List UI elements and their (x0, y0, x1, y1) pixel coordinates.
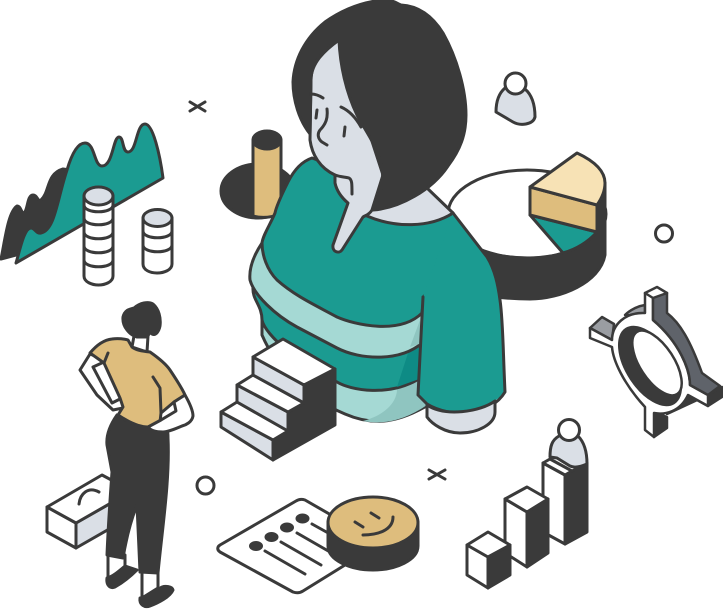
sweater dark shade (397, 343, 422, 387)
hair (123, 303, 160, 337)
left spoke top (590, 317, 614, 340)
icon: cylinder with shadow (221, 131, 295, 218)
grey side band (653, 293, 720, 395)
top grey facet (625, 305, 645, 316)
small cube (467, 545, 488, 588)
top spoke cap (645, 287, 667, 298)
face and neck (310, 40, 383, 252)
icon: smiley coin (328, 497, 418, 570)
shirt (90, 339, 185, 427)
cuff (427, 401, 495, 433)
icon: tall coin stack (84, 187, 113, 285)
face details (311, 94, 361, 194)
person on bar (550, 436, 587, 467)
shirt fold (153, 377, 161, 413)
icon: short coin stack (143, 210, 172, 273)
sweater mid band (253, 287, 422, 390)
tall bar (543, 463, 565, 544)
pants (107, 415, 168, 573)
area chart (1, 124, 163, 263)
icon: pie chart (448, 153, 606, 299)
ankles (108, 555, 158, 598)
band shading (410, 320, 422, 347)
icon: box (47, 475, 132, 548)
sweater body (262, 158, 470, 350)
icon: stairs (221, 339, 335, 460)
icon: gear ring (590, 287, 722, 437)
neck (132, 336, 148, 352)
right arm (418, 213, 505, 412)
collar and neck (367, 188, 453, 225)
sweater light band (250, 243, 422, 357)
back area (1, 169, 70, 259)
hair (293, 0, 466, 210)
middle bar (505, 499, 527, 567)
left arm (80, 354, 123, 410)
icon: bar steps with person (467, 420, 587, 588)
icon: checklist paper (218, 499, 345, 593)
cross mark bottom (429, 470, 445, 479)
standing woman (80, 303, 193, 607)
ring and spokes front (590, 293, 708, 437)
right arm (148, 395, 193, 432)
woman bust (250, 0, 505, 433)
cross mark top (190, 102, 205, 111)
sweater shading (363, 377, 427, 422)
sweater lower band (262, 320, 430, 421)
ring hole (607, 317, 693, 415)
circle outline right (656, 225, 672, 242)
bottom dark spoke (654, 412, 667, 437)
right dark spoke (667, 387, 722, 414)
front area (16, 124, 163, 263)
icon: person top (496, 73, 535, 124)
inner left arm (93, 362, 122, 403)
circle outline left (197, 477, 214, 494)
shoes (107, 566, 137, 588)
